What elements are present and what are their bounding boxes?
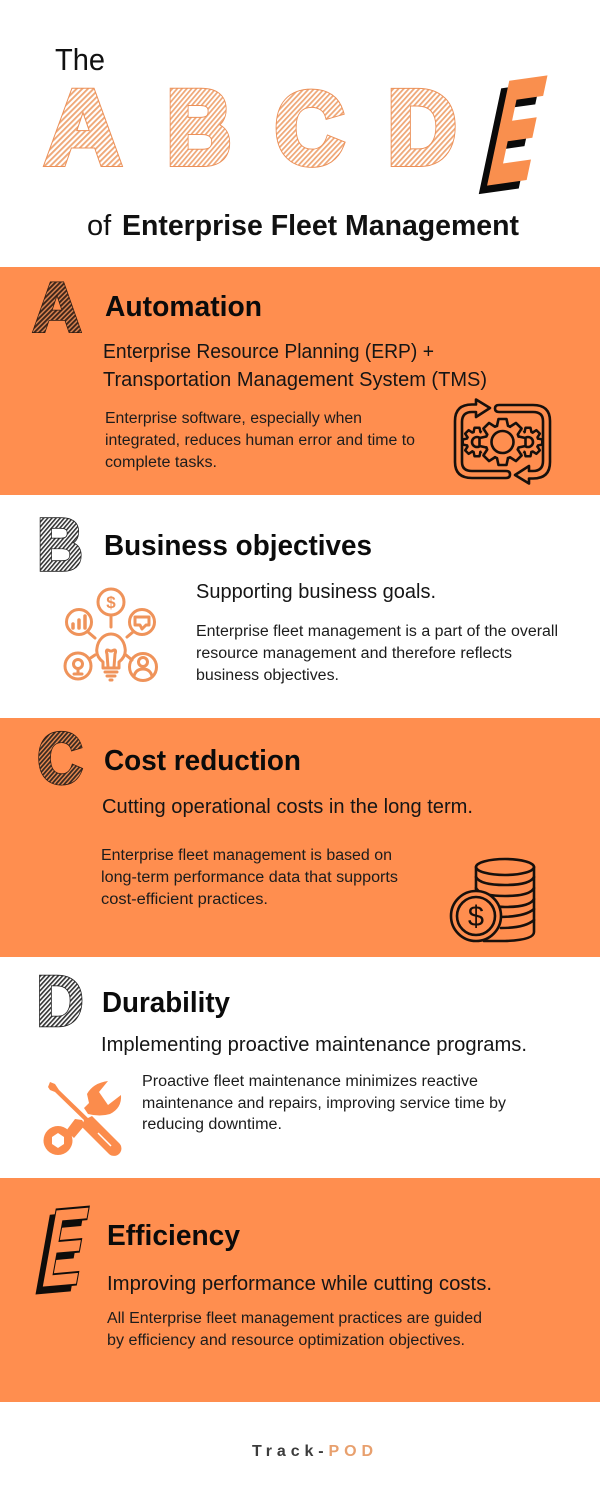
subtitle: Enterprise Fleet Management [122,210,519,242]
panel: A Automation [0,267,600,495]
subheading [103,341,487,391]
body text [107,1310,482,1349]
subheading: Enterprise Resource Planning (ERP) + [103,341,434,363]
body text: All Enterprise fleet management practices are guided [107,1310,482,1327]
letter B: B [37,504,83,586]
big letter A: A [45,70,121,186]
subheading: Transportation Management System (TMS) [103,369,487,391]
subtitle: of [87,210,112,242]
body text: business objectives. [196,667,339,684]
big letter B: B [167,69,231,186]
body text: by efficiency and resource optimization objectives. [107,1332,465,1349]
heading: Automation [105,291,262,323]
body text: integrated, reduces human error and time to [105,432,415,449]
body text: maintenance and repairs, improving service time by [142,1095,506,1112]
big letter D: D [387,69,457,187]
icon: coin stack: $ [468,901,484,933]
letter A: A [32,268,82,346]
big slanted letter E: E [477,45,557,216]
body text [105,410,415,471]
big letter A: A [45,70,121,186]
big letter C: C [275,72,344,185]
letter D: D [36,962,84,1041]
body text: reducing downtime. [142,1116,282,1133]
letter E: E [34,1181,97,1313]
body text: Enterprise software, especially when [105,410,362,427]
panel: C Cost reduction [0,718,600,957]
body text [142,1073,506,1133]
big slanted letter E: E [469,53,549,224]
subheading: Implementing proactive maintenance programs. [101,1034,527,1056]
body text [196,623,558,684]
big letter C: C [275,72,344,185]
letter C: C [37,719,83,799]
body text: long-term performance data that supports [101,869,398,886]
footer logo: Track-POD: Track- POD [252,1443,373,1460]
letter C: C [37,719,83,799]
letter E: E [28,1187,91,1319]
panel: B Business objectives [37,504,558,684]
icon: wrench and screwdriver [44,1081,121,1156]
letter D: D [36,962,84,1041]
body text: cost-efficient practices. [101,891,268,908]
icon: light bulb with business circles [65,589,156,680]
title: The: The [55,42,105,77]
big letter B: B [167,69,231,186]
heading: Business objectives [104,530,372,562]
title block [45,42,557,242]
subheading: Improving performance while cutting costs. [107,1273,492,1295]
body text [101,847,398,908]
letter A: A [32,268,82,346]
big letter D: D [387,69,457,187]
icon: coin stack [451,859,534,941]
body text: Proactive fleet maintenance minimizes reactive [142,1073,478,1090]
heading: Cost reduction [104,745,301,777]
body text: Enterprise fleet management is a part of the overall [196,623,558,640]
subheading: Cutting operational costs in the long term. [102,796,473,818]
icon: gears with cycle arrows [455,400,550,484]
panel: D Durability [36,962,527,1156]
letter B: B [37,504,83,586]
body text: resource management and therefore reflects [196,645,512,662]
body text: Enterprise fleet management is based on [101,847,392,864]
body text: complete tasks. [105,454,217,471]
panel: E Efficiency [0,1178,600,1402]
icon: light bulb with business circles: $ [106,593,116,612]
subheading: Supporting business goals. [196,581,436,603]
heading: Durability [102,987,230,1019]
heading: Efficiency [107,1220,240,1252]
